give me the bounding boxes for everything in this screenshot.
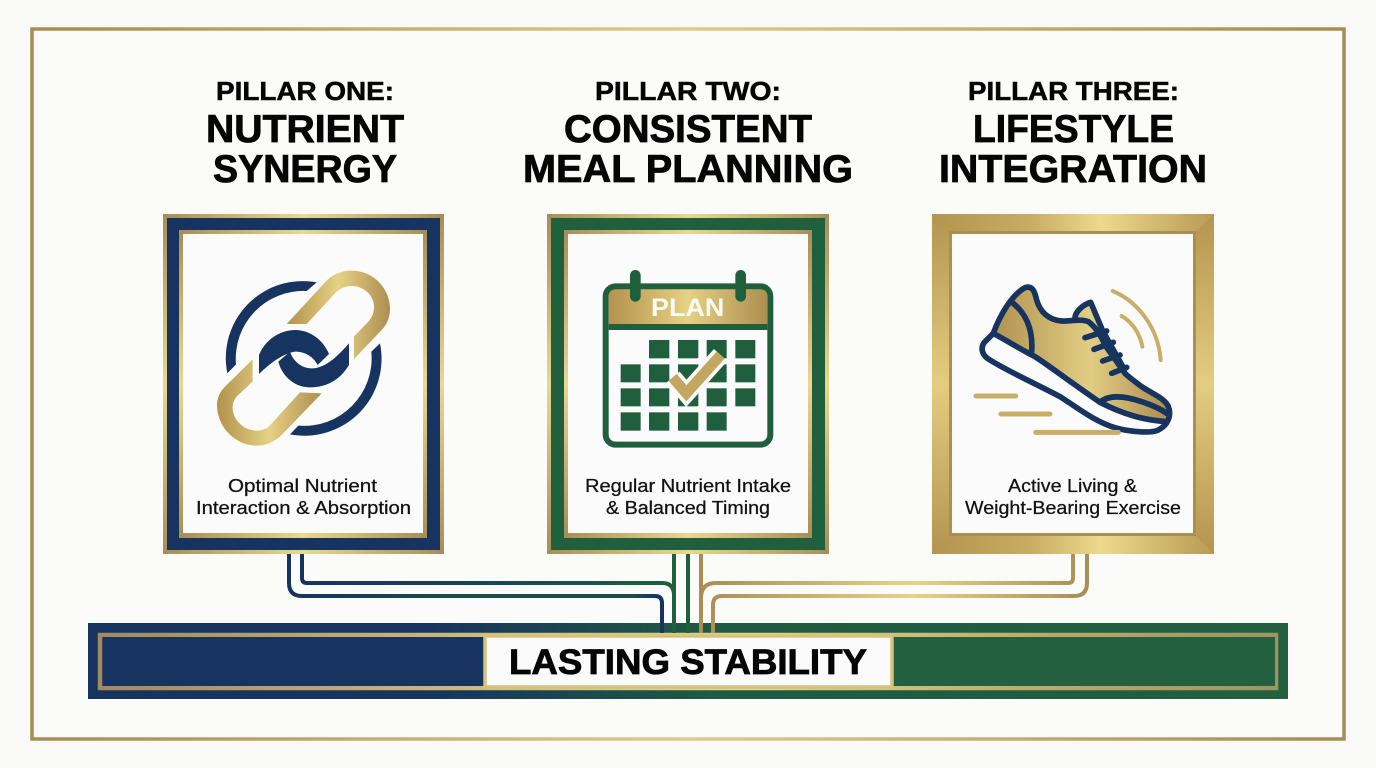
icon: plan calendar (606, 270, 770, 445)
panel: consistent meal planning (547, 214, 829, 554)
heading: pillar one: SYNERGY (213, 148, 397, 191)
heading: pillar two: MEAL PLANNING (523, 148, 853, 191)
icon: interlocking chain links (217, 271, 390, 446)
caption: nutrient synergy: Interaction & Absorption (196, 498, 411, 518)
panel: nutrient synergy (163, 214, 444, 554)
heading: pillar three: PILLAR THREE: (968, 76, 1179, 106)
caption: lifestyle integration: Active Living & (1008, 476, 1137, 496)
panel: lifestyle integration (932, 214, 1214, 554)
heading: pillar two: PILLAR TWO: (595, 76, 781, 106)
connector lines: pillar one to bar (289, 554, 674, 633)
connector lines: pillar three to bar (701, 554, 1087, 633)
icon: plan calendar: PLAN (651, 294, 724, 322)
heading: pillar one: PILLAR ONE: (216, 76, 394, 106)
heading: pillar two: CONSISTENT (564, 108, 812, 151)
caption: lifestyle integration (965, 476, 1181, 518)
heading: pillar three: LIFESTYLE (973, 108, 1174, 151)
heading: pillar one: NUTRIENT (206, 108, 404, 151)
caption: consistent meal planning: & Balanced Timing (606, 498, 770, 518)
banner: lasting stability (88, 623, 1288, 699)
caption: nutrient synergy (196, 476, 411, 518)
caption: consistent meal planning (585, 476, 791, 518)
banner title: LASTING STABILITY (509, 643, 867, 682)
caption: lifestyle integration: Weight-Bearing Exercise (965, 498, 1181, 518)
connector lines: pillar two to bar (674, 554, 688, 633)
heading: pillar two (523, 76, 853, 191)
heading: pillar three (939, 76, 1207, 191)
caption: consistent meal planning: Regular Nutrient Intake (585, 476, 791, 496)
caption: nutrient synergy: Optimal Nutrient (228, 476, 377, 496)
heading: pillar one (206, 76, 404, 191)
icon: running shoe (976, 287, 1170, 432)
heading: pillar three: INTEGRATION (939, 148, 1207, 191)
